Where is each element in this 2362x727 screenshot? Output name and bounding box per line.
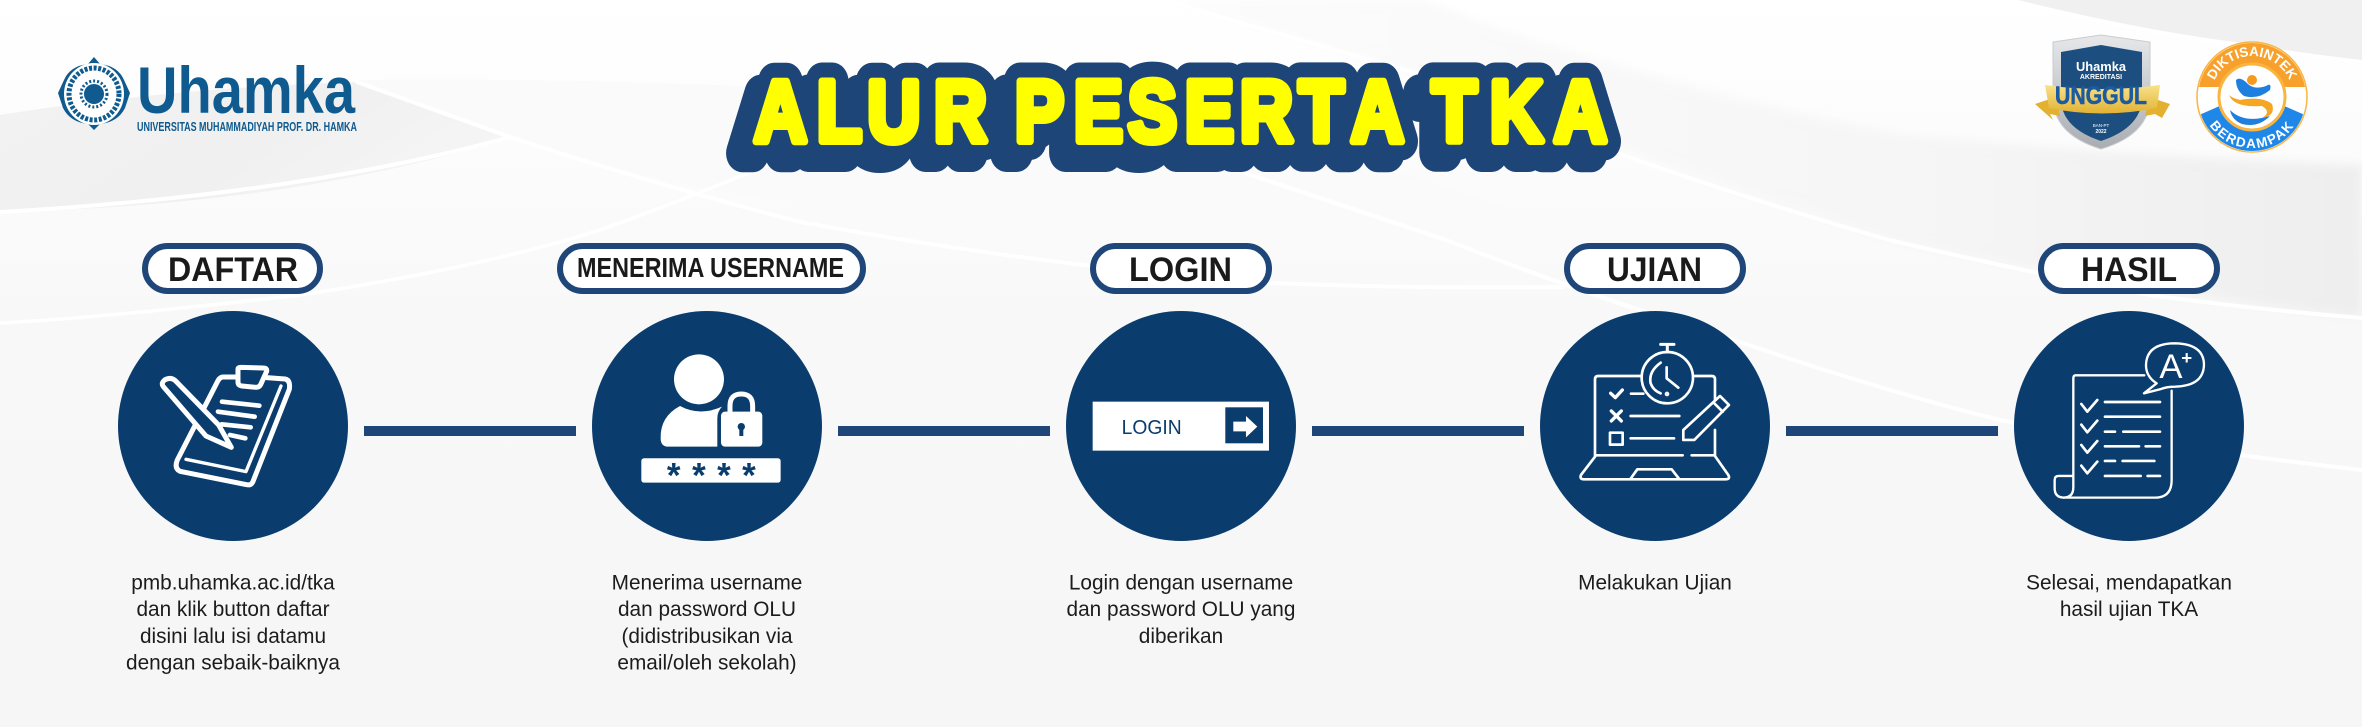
heading pill: DAFTAR [145,246,320,291]
panel: step 4 ujian [1540,246,1770,594]
connector line 4 [1786,426,1998,436]
panel: step 1 daftar [118,246,348,674]
panel: step 3 login [1066,246,1296,648]
icon: clipboard and pen [162,367,290,485]
badge: diktisaintek berdampak: DIKTISAINTEK [2206,46,2298,80]
description text: pmb.uhamka.ac.id/tka [131,572,335,594]
badge: akreditasi unggul: AKREDITASI [2080,74,2122,81]
description text: dan password OLU yang [1067,598,1295,621]
step circle [1540,311,1770,541]
heading pill: MENERIMA USERNAME [560,246,863,291]
connector line 1 [364,426,576,436]
heading pill: UJIAN [1567,246,1743,291]
icon: user with lock and password: * [692,456,706,495]
heading pill: HASIL: HASIL [2081,251,2177,289]
icon: university crest [58,57,130,130]
panel: step 5 hasil [2014,246,2244,621]
badge: akreditasi unggul: UNGGUL [2055,82,2147,110]
badge: akreditasi unggul [2035,35,2170,149]
icon: user with lock and password: * [667,456,681,495]
description text: email/oleh sekolah) [617,652,797,674]
description text: Selesai, mendapatkan [2026,572,2232,594]
heading pill: HASIL [2041,246,2217,291]
heading pill: LOGIN [1093,246,1269,291]
heading pill: LOGIN: LOGIN [1129,251,1232,289]
title: ALUR PESERTA TKA [754,63,1607,159]
badge: diktisaintek berdampak [2196,41,2308,153]
description text: dan password OLU [618,598,796,621]
step circle [1066,311,1296,541]
title: ALUR PESERTA TKA [740,75,1593,171]
description text: dengan sebaik-baiknya [126,652,340,674]
icon: graded result sheet: + [2181,347,2192,368]
title: ALUR PESERTA TKA [754,63,1607,159]
icon: laptop exam with stopwatch [1581,344,1729,479]
heading pill: UJIAN: UJIAN [1607,251,1702,289]
description text: Melakukan Ujian [1578,572,1732,594]
description text: hasil ujian TKA [2060,598,2198,621]
heading pill: DAFTAR: DAFTAR [168,251,298,289]
badge: akreditasi unggul: 2022 [2095,129,2107,135]
icon: login button: LOGIN [1122,417,1182,439]
panel: step 2 menerima username [560,246,863,674]
badge: akreditasi unggul: BAN-PT [2093,123,2109,128]
description text: dan klik button daftar [136,598,330,621]
description text: Login dengan username [1069,572,1293,594]
step circle [592,311,822,541]
connector line 2 [838,426,1050,436]
step circle [2014,311,2244,541]
logo wordmark: Uhamka [137,53,356,127]
icon: user with lock and password [641,354,781,495]
description text: (didistribusikan via [621,625,793,648]
description text: diberikan [1139,625,1223,648]
icon: login button [1093,402,1269,451]
step circle [118,311,348,541]
icon: graded result sheet: A [2159,348,2183,386]
icon: graded result sheet [2055,343,2204,498]
connector line 3 [1312,426,1524,436]
badge: diktisaintek berdampak: BERDAMPAK [2210,120,2294,148]
badge: akreditasi unggul: Uhamka [2076,59,2127,74]
description text: Menerima username [612,572,802,594]
icon: user with lock and password: * [717,456,731,495]
icon: user with lock and password: * [742,456,756,495]
logo: Uhamka [58,53,357,134]
heading pill: MENERIMA USERNAME: MENERIMA USERNAME [577,252,844,283]
description text: disini lalu isi datamu [140,625,326,648]
logo subtitle: UNIVERSITAS MUHAMMADIYAH PROF. DR. HAMKA [137,120,357,134]
